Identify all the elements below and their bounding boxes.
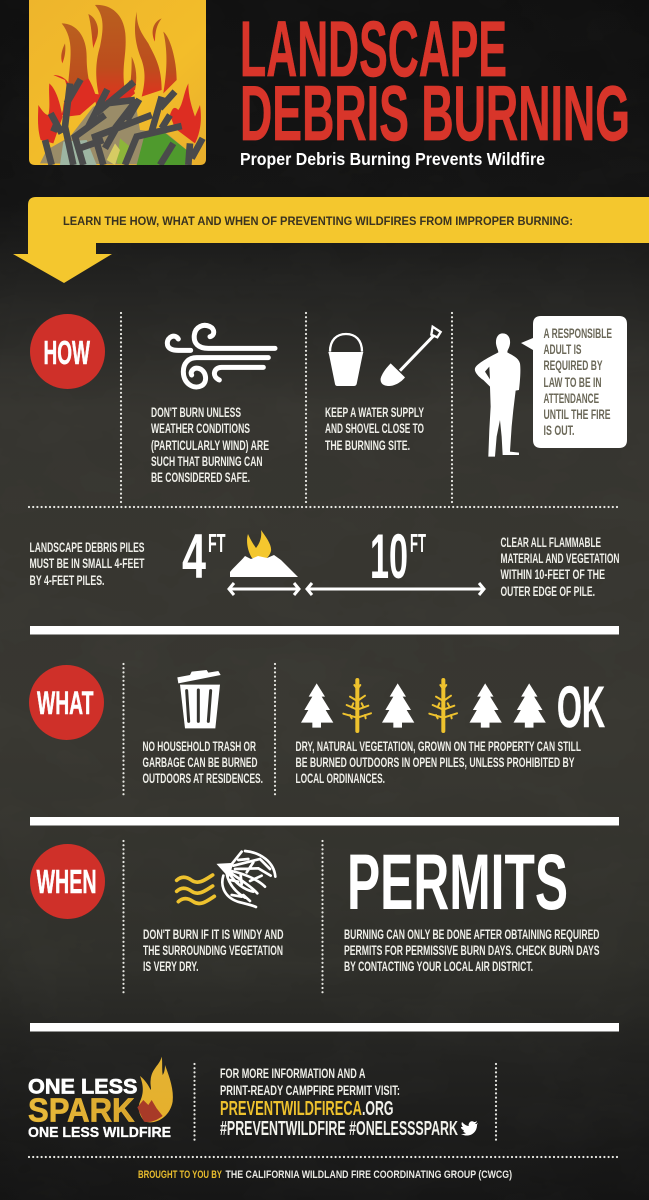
icon: dry tumbleweed [219,851,275,907]
bucket text: KEEP A WATER SUPPLY [325,405,424,420]
more information text [220,1066,458,1140]
vegetation text [296,739,581,786]
foliage [40,98,187,165]
bucket text: AND SHOVEL CLOSE TO [325,421,424,436]
when badge: WHEN [36,863,96,900]
icon: trash can [177,670,221,728]
more information text: #PREVENTWILDFIRE #ONELESSSPARK [220,1118,458,1140]
10 ft arrow [307,583,484,595]
more information text: .ORG [362,1098,394,1120]
4 ft arrow [229,583,299,595]
footer credit: BROUGHT TO YOU BY [138,1169,222,1181]
what badge [29,665,104,740]
logo: one less spark: SPARK [28,1092,135,1128]
speech bubble: IS OUT. [544,423,574,438]
permits text: BY CONTACTING YOUR LOCAL AIR DISTRICT. [344,959,533,974]
pile size text: BY 4-FEET PILES. [30,573,104,588]
more information text: PRINT-READY CAMPFIRE PERMIT VISIT: [220,1083,400,1098]
dark branches [45,79,203,165]
section: what [29,664,605,797]
wind text: SUCH THAT BURNING CAN [151,454,262,469]
wind text: WEATHER CONDITIONS [151,421,250,436]
speech bubble: LAW TO BE IN [544,375,602,390]
dry vegetation text: IS VERY DRY. [143,959,198,974]
icon: wind [167,325,275,387]
dry vegetation text [143,927,284,974]
logo flame [137,1057,173,1122]
logo: one less spark [28,1057,173,1141]
10 ft measure: 10 [370,522,408,592]
trash text: NO HOUSEHOLD TRASH OR [142,739,256,754]
speech bubble: ADULT IS [544,342,582,357]
pile size text: MUST BE IN SMALL 4-FEET [30,556,145,571]
4 ft measure: FT [208,528,226,558]
vegetation text: LOCAL ORDINANCES. [296,771,385,786]
trash text: GARBAGE CAN BE BURNED [142,755,258,770]
bucket text [325,405,424,453]
section: when [30,838,600,994]
speech bubble: REQUIRED BY [544,358,602,373]
subtitle: Proper Debris Burning Prevents Wildfire [240,149,545,169]
4 ft measure: 4 [182,522,206,592]
pile size text: LANDSCAPE DEBRIS PILES [30,540,144,555]
logo: one less spark: ONE LESS [28,1074,138,1098]
yellow banner arrow [13,197,649,283]
more information text: FOR MORE INFORMATION AND A [220,1066,366,1081]
what badge: WHAT [37,685,94,721]
section: pile clearance [30,522,620,599]
10 ft measure: FT [410,528,426,558]
how badge: HOW [44,334,90,371]
flames [61,5,177,117]
icon: twitter bird [461,1121,478,1136]
icon: responsible adult [475,333,520,457]
footer credit: THE CALIFORNIA WILDLAND FIRE COORDINATING GROUP (CWCG) [226,1169,512,1181]
title [240,5,630,157]
speech bubble: UNTIL THE FIRE [544,407,610,422]
wind text [151,405,269,485]
bucket text: THE BURNING SITE. [325,438,410,453]
header illustration: burning debris pile [29,0,206,165]
clearance text [500,535,620,599]
icon row: trees [301,680,546,731]
clearance text: OUTER EDGE OF PILE. [500,584,595,599]
speech bubble: ATTENDANCE [544,391,599,406]
when badge [30,844,105,919]
wind text: DON'T BURN UNLESS [151,405,241,420]
icon: wind waves [177,875,214,904]
banner text: LEARN THE HOW, WHAT AND WHEN OF PREVENTING WILDFIRES FROM IMPROPER BURNING: [63,215,573,228]
ok label: OK [557,675,605,740]
trash text: OUTDOORS AT RESIDENCES. [142,771,263,786]
wind text: (PARTICULARLY WIND) ARE [151,438,269,453]
dry vegetation text: THE SURROUNDING VEGETATION [143,943,283,958]
icon: debris pile with flame [230,530,298,577]
speech bubble [521,316,627,448]
more information text: PREVENTWILDFIRECA [220,1098,362,1120]
red flames [38,75,201,143]
icon: shovel [381,327,441,386]
section: how [30,313,627,503]
logo: one less spark: ONE LESS WILDFIRE [28,1125,171,1141]
permits text [344,927,600,974]
trash text [142,739,263,786]
how badge [30,314,105,389]
dry vegetation text: DON'T BURN IF IT IS WINDY AND [143,927,284,942]
icon: bucket [328,334,363,386]
pile size text [30,540,145,588]
wind text: BE CONSIDERED SAFE. [151,470,250,485]
footer credit [138,1169,512,1181]
